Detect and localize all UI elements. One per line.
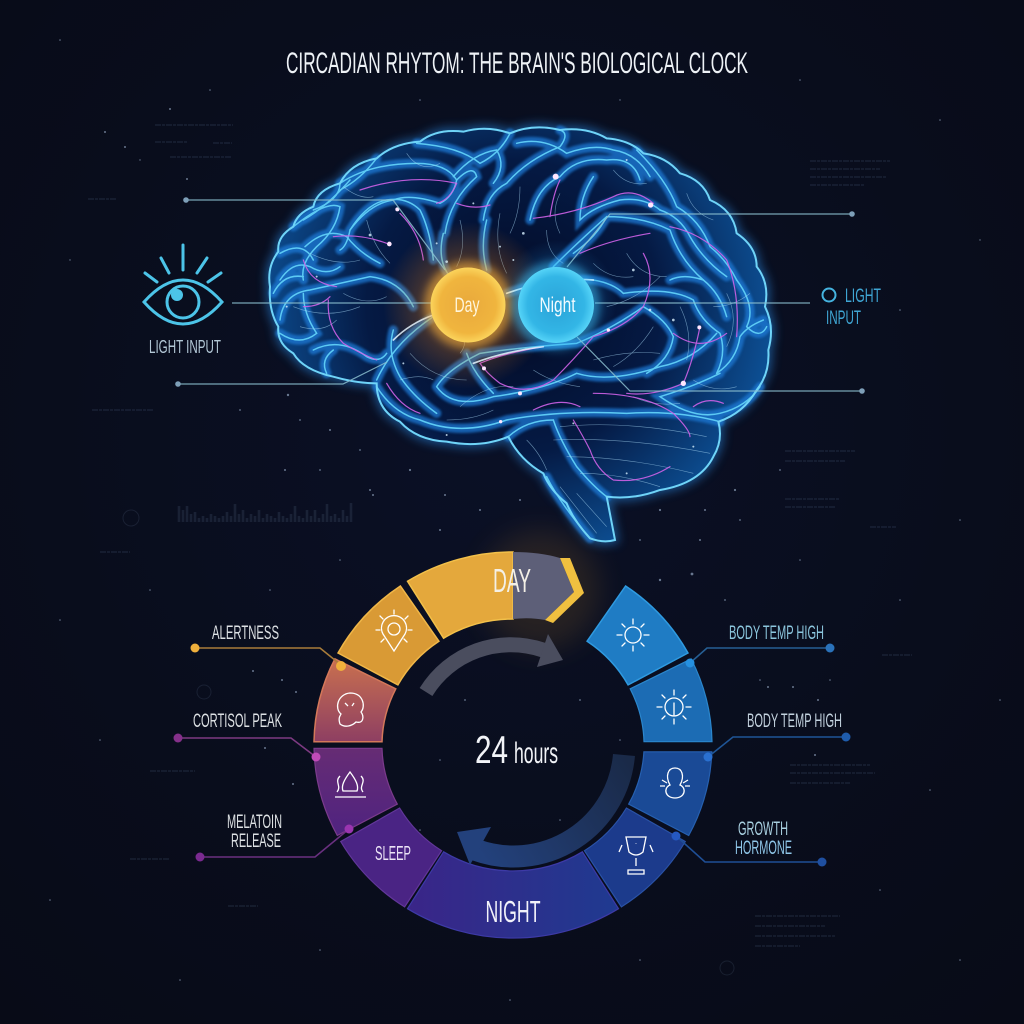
callout: body temp high 1: BODY TEMP HIGH xyxy=(729,623,824,644)
night arrow xyxy=(457,755,624,865)
segment: alertness xyxy=(338,586,439,685)
light input label right: INPUT xyxy=(826,308,861,329)
segment: cortisol peak purple xyxy=(314,748,397,836)
callout: growth hormone: GROWTH xyxy=(738,819,788,840)
faint ring marks xyxy=(123,510,734,975)
segment: day: DAY xyxy=(493,562,531,599)
connector lines from brain xyxy=(178,200,862,391)
segment: day xyxy=(408,552,584,638)
segment: night: NIGHT xyxy=(486,894,541,929)
light input label left: LIGHT INPUT xyxy=(149,337,221,357)
center label: 24 hours: hours xyxy=(514,737,558,770)
callout: growth hormone xyxy=(672,819,826,866)
night node: Night xyxy=(540,294,576,317)
light input label right: LIGHT xyxy=(845,286,881,307)
center label: 24 hours: 24 xyxy=(475,729,508,772)
day node xyxy=(424,261,512,349)
callout: melatonin release: RELEASE xyxy=(231,831,281,852)
callout: melatonin release xyxy=(196,812,354,862)
night node xyxy=(512,261,600,349)
faint background data marks xyxy=(88,125,912,946)
segment: sleep xyxy=(341,808,442,907)
callout: cortisol peak xyxy=(174,711,320,762)
segment: night xyxy=(408,852,618,938)
connector end dots xyxy=(175,197,865,394)
segment: body temp 1 xyxy=(587,586,688,685)
faint bar chart xyxy=(179,503,351,522)
callout: body temp high 2: BODY TEMP HIGH xyxy=(747,711,842,732)
day node: Day xyxy=(454,294,480,317)
light input label right xyxy=(822,286,881,329)
callout: cortisol peak: CORTISOL PEAK xyxy=(193,711,282,732)
segment: body temp 2 xyxy=(630,659,712,742)
callout: body temp high 1 xyxy=(686,623,834,668)
callout: melatonin release: MELATOIN xyxy=(227,812,282,833)
brain illustration xyxy=(269,127,771,541)
24 hour ring xyxy=(314,530,712,938)
day arrow xyxy=(426,634,563,692)
callout: alertness xyxy=(190,623,346,671)
icon: eye xyxy=(144,245,222,324)
segment: growth xyxy=(584,808,685,907)
segment: sleep: SLEEP xyxy=(375,843,411,865)
center label: 24 hours xyxy=(475,729,558,772)
segment: body temp 3 xyxy=(629,752,712,836)
segment: cortisol xyxy=(314,659,396,742)
callout: body temp high 2 xyxy=(704,711,850,762)
callout: growth hormone: HORMONE xyxy=(735,838,792,859)
callout: alertness: ALERTNESS xyxy=(212,623,279,644)
